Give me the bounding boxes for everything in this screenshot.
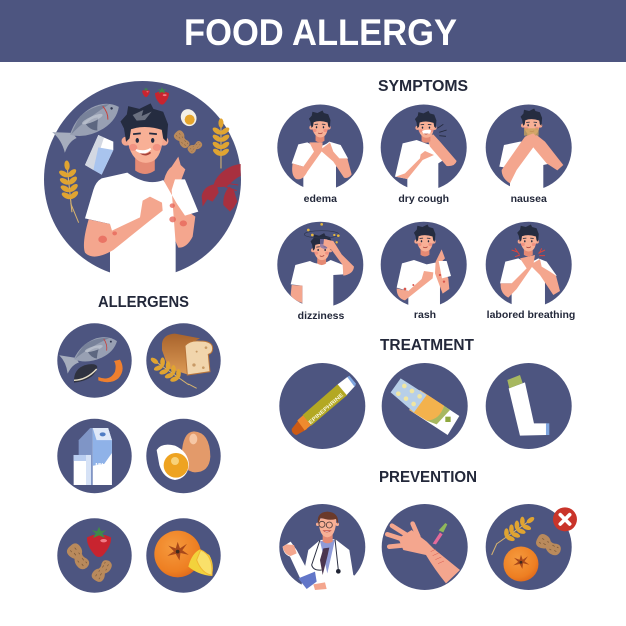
man head [120, 103, 168, 174]
panel: rash [381, 222, 467, 321]
icon: peanut [534, 532, 564, 558]
icon: wheat left [57, 159, 82, 223]
panel: eggs [146, 419, 221, 493]
icon: fish [50, 97, 127, 154]
heading: allergens: ALLERGENS [98, 294, 189, 311]
panel: skin prick test [382, 504, 468, 590]
icon: orange [154, 531, 201, 577]
icon: strawberry [87, 527, 111, 557]
icon: boiled egg half [157, 445, 189, 480]
heading: symptoms: SYMPTOMS [378, 78, 468, 95]
icon: lobster [202, 164, 241, 212]
icon: orange [503, 546, 538, 581]
panel: nausea [486, 104, 572, 205]
man right arm behind [164, 157, 195, 248]
title banner [0, 0, 626, 62]
icon: peanut 2 [90, 557, 114, 584]
panel: dizziness [277, 222, 363, 322]
man left arm [84, 197, 163, 257]
icon: peanut 1 [65, 541, 93, 572]
panel: orange and lemon [146, 518, 221, 593]
icon: glass of milk [74, 455, 91, 485]
icon: carton: MILK [95, 463, 110, 469]
icon: wheat [146, 351, 197, 392]
panel: labored breathing [486, 222, 575, 321]
icon: strawberries [142, 87, 169, 105]
icon: fish [58, 333, 122, 374]
label: nausea [511, 193, 547, 205]
icon: red cross badge [553, 507, 577, 531]
panel: bread and wheat [146, 323, 221, 398]
label: labored breathing [487, 309, 575, 321]
heading: treatment: TREATMENT [380, 337, 475, 354]
heading: prevention: PREVENTION [379, 469, 477, 486]
panel: edema [277, 104, 363, 205]
panel: inhaler [486, 363, 572, 449]
title: FOOD ALLERGY [184, 12, 457, 53]
icon: lemon [188, 549, 213, 576]
icon: wheat right [211, 118, 231, 168]
icon: peanuts [172, 129, 204, 155]
label: rash [414, 309, 436, 321]
man shirt [85, 173, 198, 280]
icon: mussel [74, 364, 97, 383]
panel: fish and seafood [57, 323, 132, 398]
panel: doctor [279, 504, 365, 593]
rash marks [98, 203, 187, 243]
group: symptoms row 2 [277, 222, 575, 322]
icon: egg [178, 107, 199, 129]
label: dizziness [298, 310, 344, 322]
panel: peanuts and strawberry [57, 518, 132, 593]
panel: dry cough [381, 104, 467, 205]
group: symptoms row 1 [277, 104, 572, 205]
icon: milk carton [85, 135, 113, 175]
label: dry cough [398, 193, 449, 205]
panel: epinephrine pen: EPINEPHRINE [308, 392, 345, 426]
panel: main allergic man [44, 81, 241, 280]
panel: avoid allergens [486, 504, 577, 590]
icon: wheat [491, 510, 539, 555]
icon: whole egg [182, 431, 210, 472]
panel: pill pack [382, 363, 468, 449]
icon: bread loaf [162, 334, 213, 375]
panel: epinephrine pen [279, 363, 365, 449]
icon: shrimp [98, 360, 123, 382]
label: edema [304, 193, 337, 205]
panel: milk [57, 419, 132, 493]
